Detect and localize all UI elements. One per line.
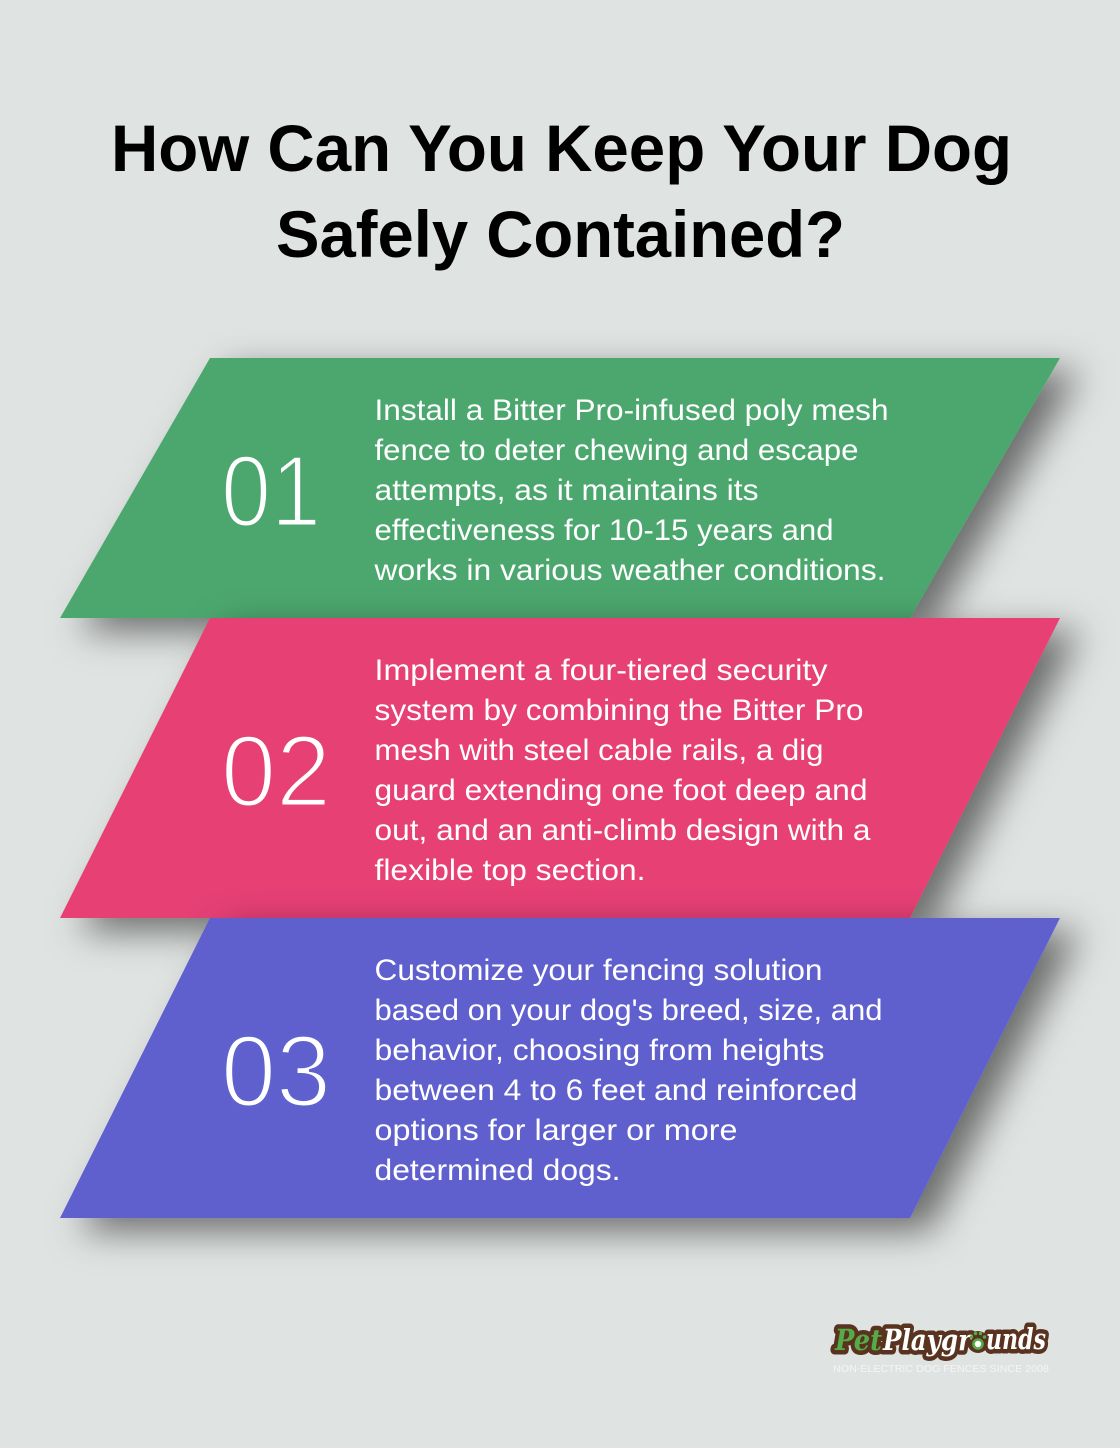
- logo backing: unds: [986, 1322, 1046, 1356]
- step 01 text: Install a Bitter Pro-infused poly mesh: [374, 394, 888, 427]
- step 02 text: Implement a four-tiered security: [374, 654, 828, 687]
- logo backing: [834, 1322, 1046, 1357]
- icon: paw: [970, 1332, 986, 1348]
- step 01 text: works in various weather conditions.: [373, 554, 886, 587]
- logo backing: Pet: [834, 1323, 883, 1357]
- step 03 text: behavior, choosing from heights: [374, 1034, 824, 1067]
- step 03 text: determined dogs.: [374, 1154, 620, 1187]
- pink parallelogram: [60, 618, 1060, 918]
- step 02 text: flexible top section.: [374, 854, 646, 887]
- step 02 text: mesh with steel cable rails, a dig: [374, 734, 824, 767]
- number 02: 02: [221, 716, 331, 828]
- panel: step 03: [60, 918, 1060, 1218]
- step 03 text: Customize your fencing solution: [374, 954, 822, 987]
- blue parallelogram: [60, 918, 1060, 1218]
- panel: step 02: [60, 618, 1060, 918]
- step 02 text: [374, 654, 871, 887]
- title: [111, 111, 1012, 271]
- title: How Can You Keep Your Dog: [111, 111, 1012, 185]
- step 01 text: fence to deter chewing and escape: [374, 434, 858, 467]
- logo: Pet Playgrounds: [833, 1322, 1049, 1375]
- logo word: unds: unds: [986, 1322, 1046, 1356]
- step 03 text: based on your dog's breed, size, and: [374, 994, 882, 1027]
- green parallelogram: [60, 358, 1060, 618]
- logo tagline: NON-ELECTRIC DOG FENCES SINCE 2008: [833, 1363, 1049, 1375]
- step 01 text: attempts, as it maintains its: [374, 474, 758, 507]
- step 02 text: out, and an anti-climb design with a: [374, 814, 871, 847]
- number 01: 01: [221, 436, 321, 548]
- step 01 text: [373, 394, 889, 587]
- step 01 text: effectiveness for 10-15 years and: [374, 514, 834, 547]
- step 02 text: system by combining the Bitter Pro: [374, 694, 864, 727]
- step 03 text: options for larger or more: [374, 1114, 738, 1147]
- logo word: Pet: Pet: [834, 1323, 883, 1357]
- title: Safely Contained?: [276, 197, 845, 271]
- logo word: Playgr: Playgr: [882, 1323, 973, 1357]
- step 03 text: between 4 to 6 feet and reinforced: [374, 1074, 858, 1107]
- logo backing: Playgr: [882, 1323, 973, 1357]
- step 03 text: [374, 954, 882, 1187]
- step 02 text: guard extending one foot deep and: [374, 774, 868, 807]
- number 03: 03: [221, 1016, 331, 1128]
- panel: step 01: [60, 358, 1060, 618]
